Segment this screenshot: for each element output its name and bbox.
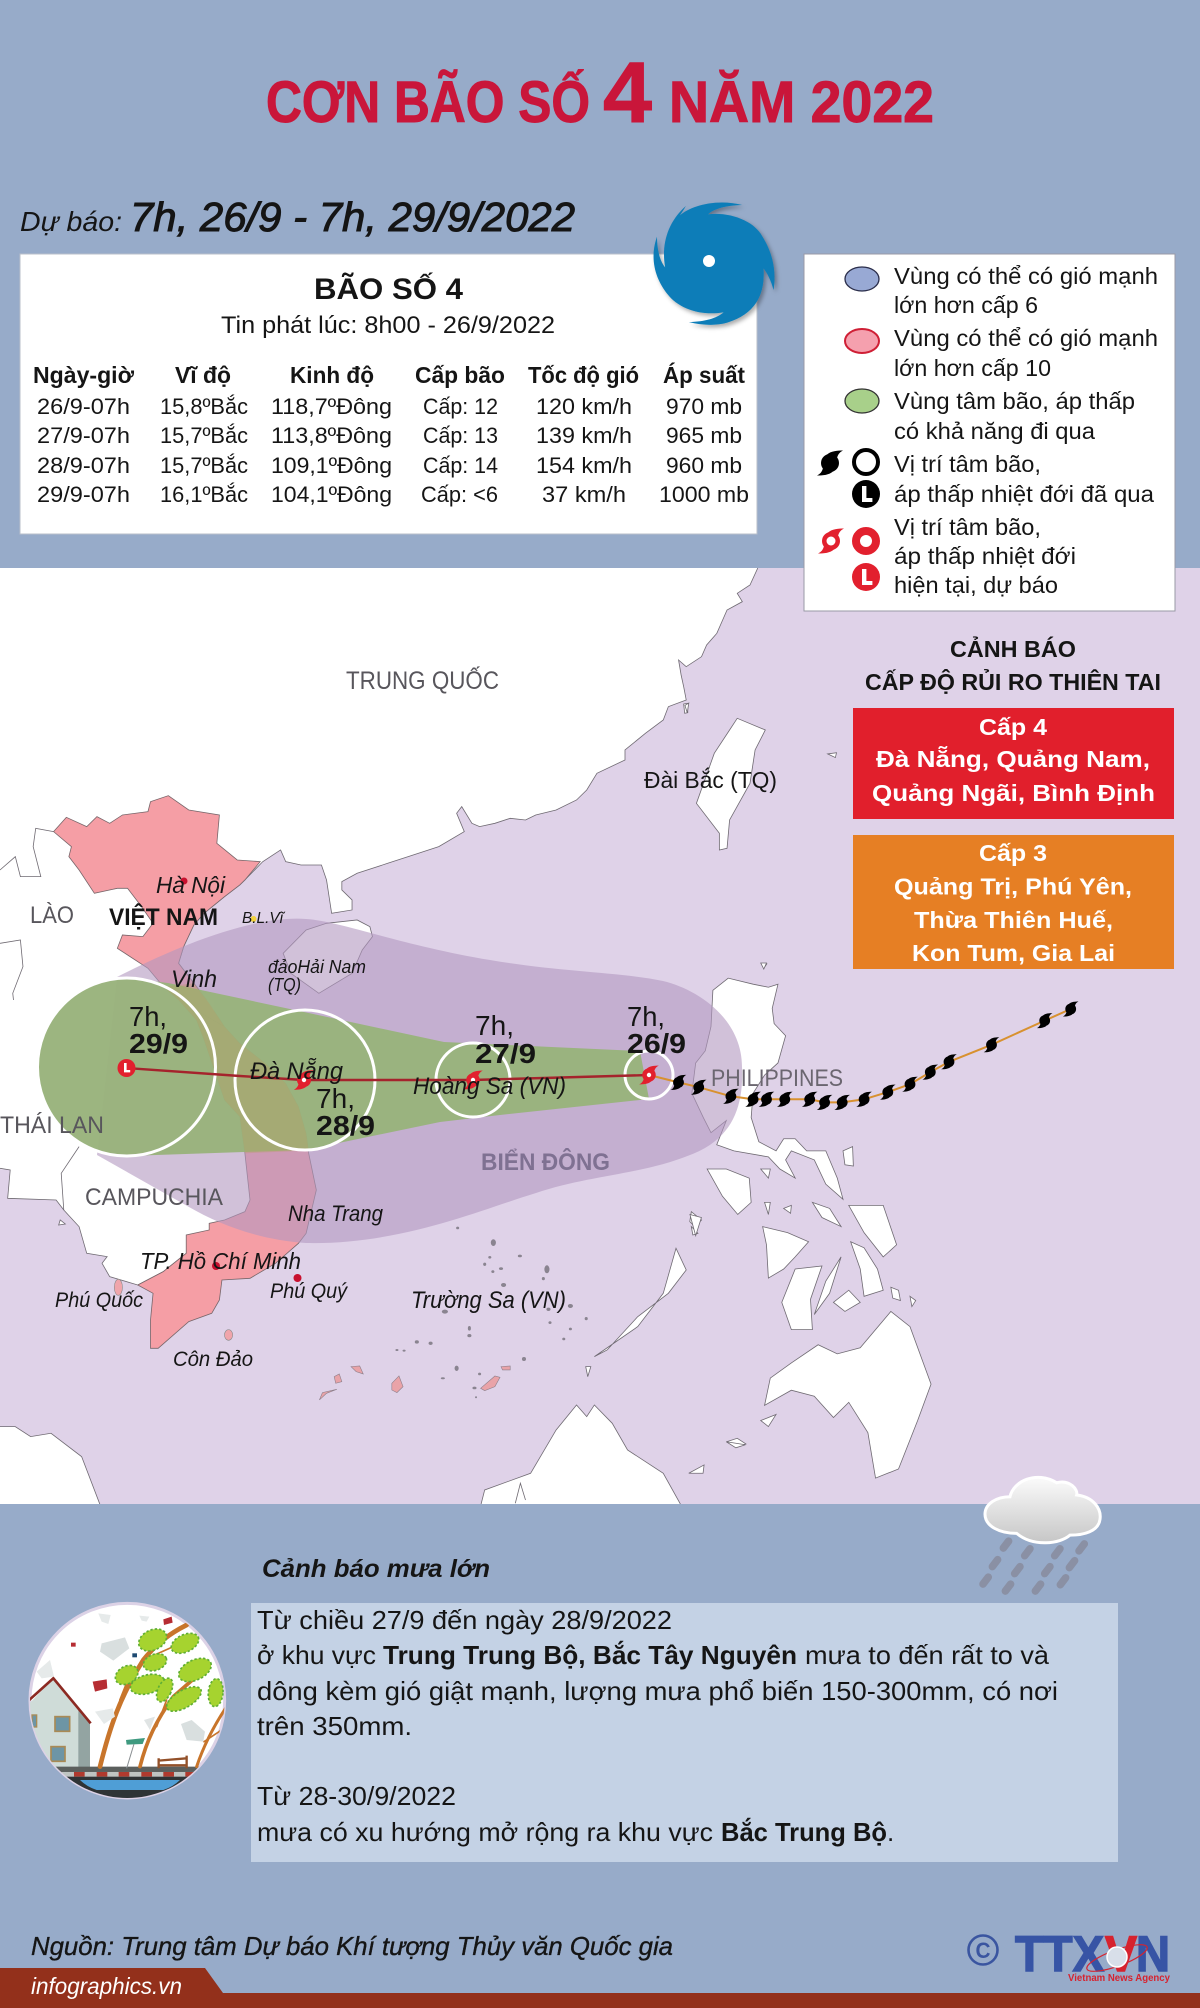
icon: rain cloud	[983, 1477, 1100, 1591]
road and water	[56, 1766, 199, 1798]
table row 29/9: 16,1ºBắc	[160, 482, 248, 507]
map labels: Đà Nẵng	[250, 1057, 344, 1085]
table row 27/9: Cấp: 13	[423, 423, 498, 448]
map labels: PHILIPPINES	[711, 1065, 843, 1092]
table heading: BÃO SỐ 4	[314, 272, 463, 306]
table row 26/9	[37, 394, 742, 419]
footer bar: infographics.vn	[31, 1973, 182, 1999]
table header row: Tốc độ gió	[528, 362, 639, 388]
table row 26/9: 120 km/h	[536, 394, 632, 419]
map labels: THÁI LAN	[0, 1112, 104, 1139]
title	[266, 45, 934, 141]
map labels: LÀO	[30, 902, 74, 929]
map labels: 28/9	[316, 1110, 375, 1141]
house	[30, 1676, 92, 1767]
heavy rain heading: Cảnh báo mưa lớn	[262, 1555, 490, 1583]
logo: TTXVN: N	[1136, 1926, 1170, 1982]
issue time: Tin phát lúc: 8h00 - 26/9/2022	[221, 312, 555, 339]
trees	[100, 1625, 227, 1767]
logo: TTXVN: TTX	[1015, 1926, 1104, 1982]
legend: gale above level 10	[845, 325, 1158, 381]
table row 28/9: 154 km/h	[536, 453, 632, 478]
table row 28/9: 15,7ºBắc	[160, 453, 248, 478]
map labels	[0, 665, 843, 1371]
table row 29/9: 1000 mb	[659, 482, 749, 507]
legend: current and forecast positions: áp thấp nhiệt đới	[894, 543, 1076, 569]
map labels: Phú Quốc	[55, 1289, 143, 1312]
map labels: đảoHải Nam	[268, 957, 366, 977]
panel: heavy rain text: Trung Trung Bộ, Bắc Tây Nguyên	[383, 1640, 797, 1670]
map labels: 7h,	[627, 1001, 665, 1032]
forecast zone: Vietnam coastline under storm path	[163, 983, 309, 1153]
title: CƠN BÃO SỐ	[266, 70, 590, 135]
forecast track	[126, 1068, 649, 1080]
panel: risk level 3: Thừa Thiên Huế,	[914, 907, 1113, 933]
city dots	[180, 878, 302, 1282]
table row 28/9: 28/9-07h	[37, 453, 130, 478]
disaster risk warning heading: CẤP ĐỘ RỦI RO THIÊN TAI	[865, 667, 1161, 695]
table row 29/9: 29/9-07h	[37, 482, 130, 507]
map labels: CAMPUCHIA	[85, 1184, 223, 1211]
islands: southern sea	[319, 1366, 510, 1400]
forecast zone: storm centre path	[37, 978, 649, 1156]
table row 27/9: 113,8ºĐông	[271, 423, 392, 448]
map labels: Hà Nội	[156, 872, 226, 898]
table row 29/9: 37 km/h	[542, 482, 626, 507]
disaster risk warning heading: CẢNH BÁO	[950, 634, 1076, 662]
title: NĂM 2022	[669, 70, 934, 135]
table row 27/9: 965 mb	[666, 423, 742, 448]
panel: risk level 4: Quảng Ngãi, Bình Định	[872, 780, 1155, 806]
table row 26/9: 118,7ºĐông	[271, 394, 392, 419]
table row 29/9: 104,1ºĐông	[271, 482, 392, 507]
table header row: Kinh độ	[290, 362, 374, 388]
past track	[649, 1009, 1071, 1102]
table row 27/9	[37, 423, 742, 448]
table row 26/9: 26/9-07h	[37, 394, 130, 419]
disaster risk warning heading	[865, 634, 1161, 695]
table header row	[33, 361, 745, 388]
panel: risk level 4	[853, 708, 1174, 819]
table row 26/9: 970 mb	[666, 394, 742, 419]
legend: current and forecast positions	[818, 514, 1076, 598]
legend: storm centre zone: Vùng tâm bão, áp thấp	[894, 388, 1135, 414]
panel: risk level 3: Quảng Trị, Phú Yên,	[894, 874, 1132, 900]
legend: storm centre zone	[845, 388, 1135, 444]
logo: TTXVN: C	[976, 1938, 991, 1963]
panel: risk level 3: Kon Tum, Gia Lai	[912, 940, 1115, 966]
land: southern region	[0, 1000, 746, 1510]
panel: heavy rain text: .	[887, 1817, 894, 1847]
logo: TTXVN: V	[1105, 1926, 1138, 1982]
panel: heavy rain text: Bắc Trung Bộ	[721, 1817, 887, 1847]
legend: past positions	[817, 450, 1154, 508]
land: northern region	[0, 568, 768, 1000]
map labels: 29/9	[129, 1028, 188, 1059]
table row 26/9: 15,8ºBắc	[160, 394, 248, 419]
panel: risk level 3: Cấp 3	[979, 840, 1047, 866]
table header row: Vĩ độ	[175, 362, 231, 388]
legend: current and forecast positions: hiện tại, dự báo	[894, 572, 1058, 598]
legend: current and forecast positions: Vị trí tâm bão,	[894, 514, 1041, 540]
table row 26/9: Cấp: 12	[423, 394, 498, 419]
table row 28/9	[37, 453, 742, 478]
forecast period heading: 7h, 26/9 - 7h, 29/9/2022	[130, 194, 575, 240]
wind zone: gale area	[97, 919, 742, 1243]
table row 27/9: 139 km/h	[536, 423, 632, 448]
map labels: 7h,	[129, 1001, 167, 1032]
table row 27/9: 15,7ºBắc	[160, 423, 248, 448]
source credit: Nguồn: Trung tâm Dự báo Khí tượng Thủy văn Quốc gia	[31, 1931, 673, 1961]
legend: gale above level 10: Vùng có thể có gió mạnh	[894, 325, 1158, 351]
map labels: 26/9	[627, 1028, 686, 1059]
panel: risk level 4: Đà Nẵng, Quảng Nam,	[876, 745, 1150, 772]
icon: blue typhoon	[654, 202, 775, 325]
table header row: Ngày-giờ	[33, 362, 135, 388]
map labels: Côn Đảo	[173, 1348, 253, 1371]
legend: storm centre zone: có khả năng đi qua	[894, 418, 1095, 444]
forecast circles	[38, 978, 673, 1156]
map labels: BIỂN ĐÔNG	[481, 1148, 610, 1176]
forecast positions	[118, 1059, 659, 1090]
table row 28/9: 109,1ºĐông	[271, 453, 392, 478]
panel: legend	[804, 254, 1175, 611]
map labels: 7h,	[475, 1010, 514, 1041]
legend: gale above level 6: lớn hơn cấp 6	[894, 292, 1038, 318]
panel: heavy rain text: trên 350mm.	[257, 1711, 412, 1741]
forecast period heading: Dự báo:	[20, 206, 122, 237]
table row 28/9: Cấp: 14	[423, 453, 498, 478]
foliage	[114, 1628, 224, 1712]
legend: gale above level 6	[845, 263, 1158, 318]
map labels: TRUNG QUỐC	[346, 665, 499, 695]
panel: heavy rain text: mưa có xu hướng mở rộng ra khu vực	[257, 1817, 713, 1847]
legend: gale above level 10: lớn hơn cấp 10	[894, 355, 1051, 381]
table row 28/9: 960 mb	[666, 453, 742, 478]
map labels: 27/9	[475, 1038, 536, 1069]
table row 27/9: 27/9-07h	[37, 423, 130, 448]
map labels: Đài Bắc (TQ)	[644, 767, 777, 793]
map labels: (TQ)	[268, 975, 301, 995]
logo: TTXVN	[968, 1926, 1170, 1984]
table header row: Áp suất	[663, 361, 745, 388]
table row 29/9: Cấp: <6	[421, 482, 498, 507]
panel: heavy rain text: dông kèm gió giật mạnh, lượng mưa phổ biến 150-300mm, có nơi	[257, 1676, 1058, 1706]
title: 4	[603, 45, 652, 141]
map labels: VIỆT NAM	[109, 903, 218, 931]
map labels: 7h,	[316, 1083, 355, 1114]
map labels: TP. Hồ Chí Minh	[140, 1248, 301, 1274]
islands: Spratly dots	[395, 1227, 588, 1398]
map labels: Phú Quý	[270, 1280, 348, 1303]
panel: risk level 3	[853, 835, 1174, 969]
panel: heavy rain text: mưa to đến rất to và	[805, 1640, 1050, 1670]
map labels: Trường Sa (VN)	[411, 1287, 566, 1314]
panel: heavy rain text: Từ chiều 27/9 đến ngày 28/9/2022	[257, 1605, 672, 1635]
icon: storm illustration	[20, 1603, 233, 1800]
footer bar	[0, 1968, 1200, 2008]
legend: gale above level 6: Vùng có thể có gió mạnh	[894, 263, 1158, 289]
map labels: Vinh	[171, 966, 217, 993]
table header row: Cấp bão	[415, 362, 505, 388]
flying debris	[37, 1613, 205, 1768]
logo: TTXVN: Vietnam News Agency	[1068, 1972, 1170, 1984]
table row 29/9	[37, 482, 749, 507]
panel: heavy rain text: Từ 28-30/9/2022	[257, 1781, 456, 1811]
map	[0, 553, 1200, 1510]
map labels: Nha Trang	[288, 1201, 384, 1226]
past storm positions	[671, 1002, 1078, 1110]
map labels: B.L.Vĩ	[242, 910, 285, 927]
land: Philippines	[685, 703, 931, 1478]
legend: past positions: áp thấp nhiệt đới đã qua	[894, 481, 1154, 507]
panel: storm data table	[20, 254, 757, 534]
panel: heavy rain text: ở khu vực	[257, 1640, 376, 1670]
panel: risk level 4: Cấp 4	[979, 714, 1047, 740]
map labels: Hoàng Sa (VN)	[413, 1073, 566, 1100]
panel: heavy rain text	[251, 1603, 1118, 1862]
legend: past positions: Vị trí tâm bão,	[894, 451, 1041, 477]
